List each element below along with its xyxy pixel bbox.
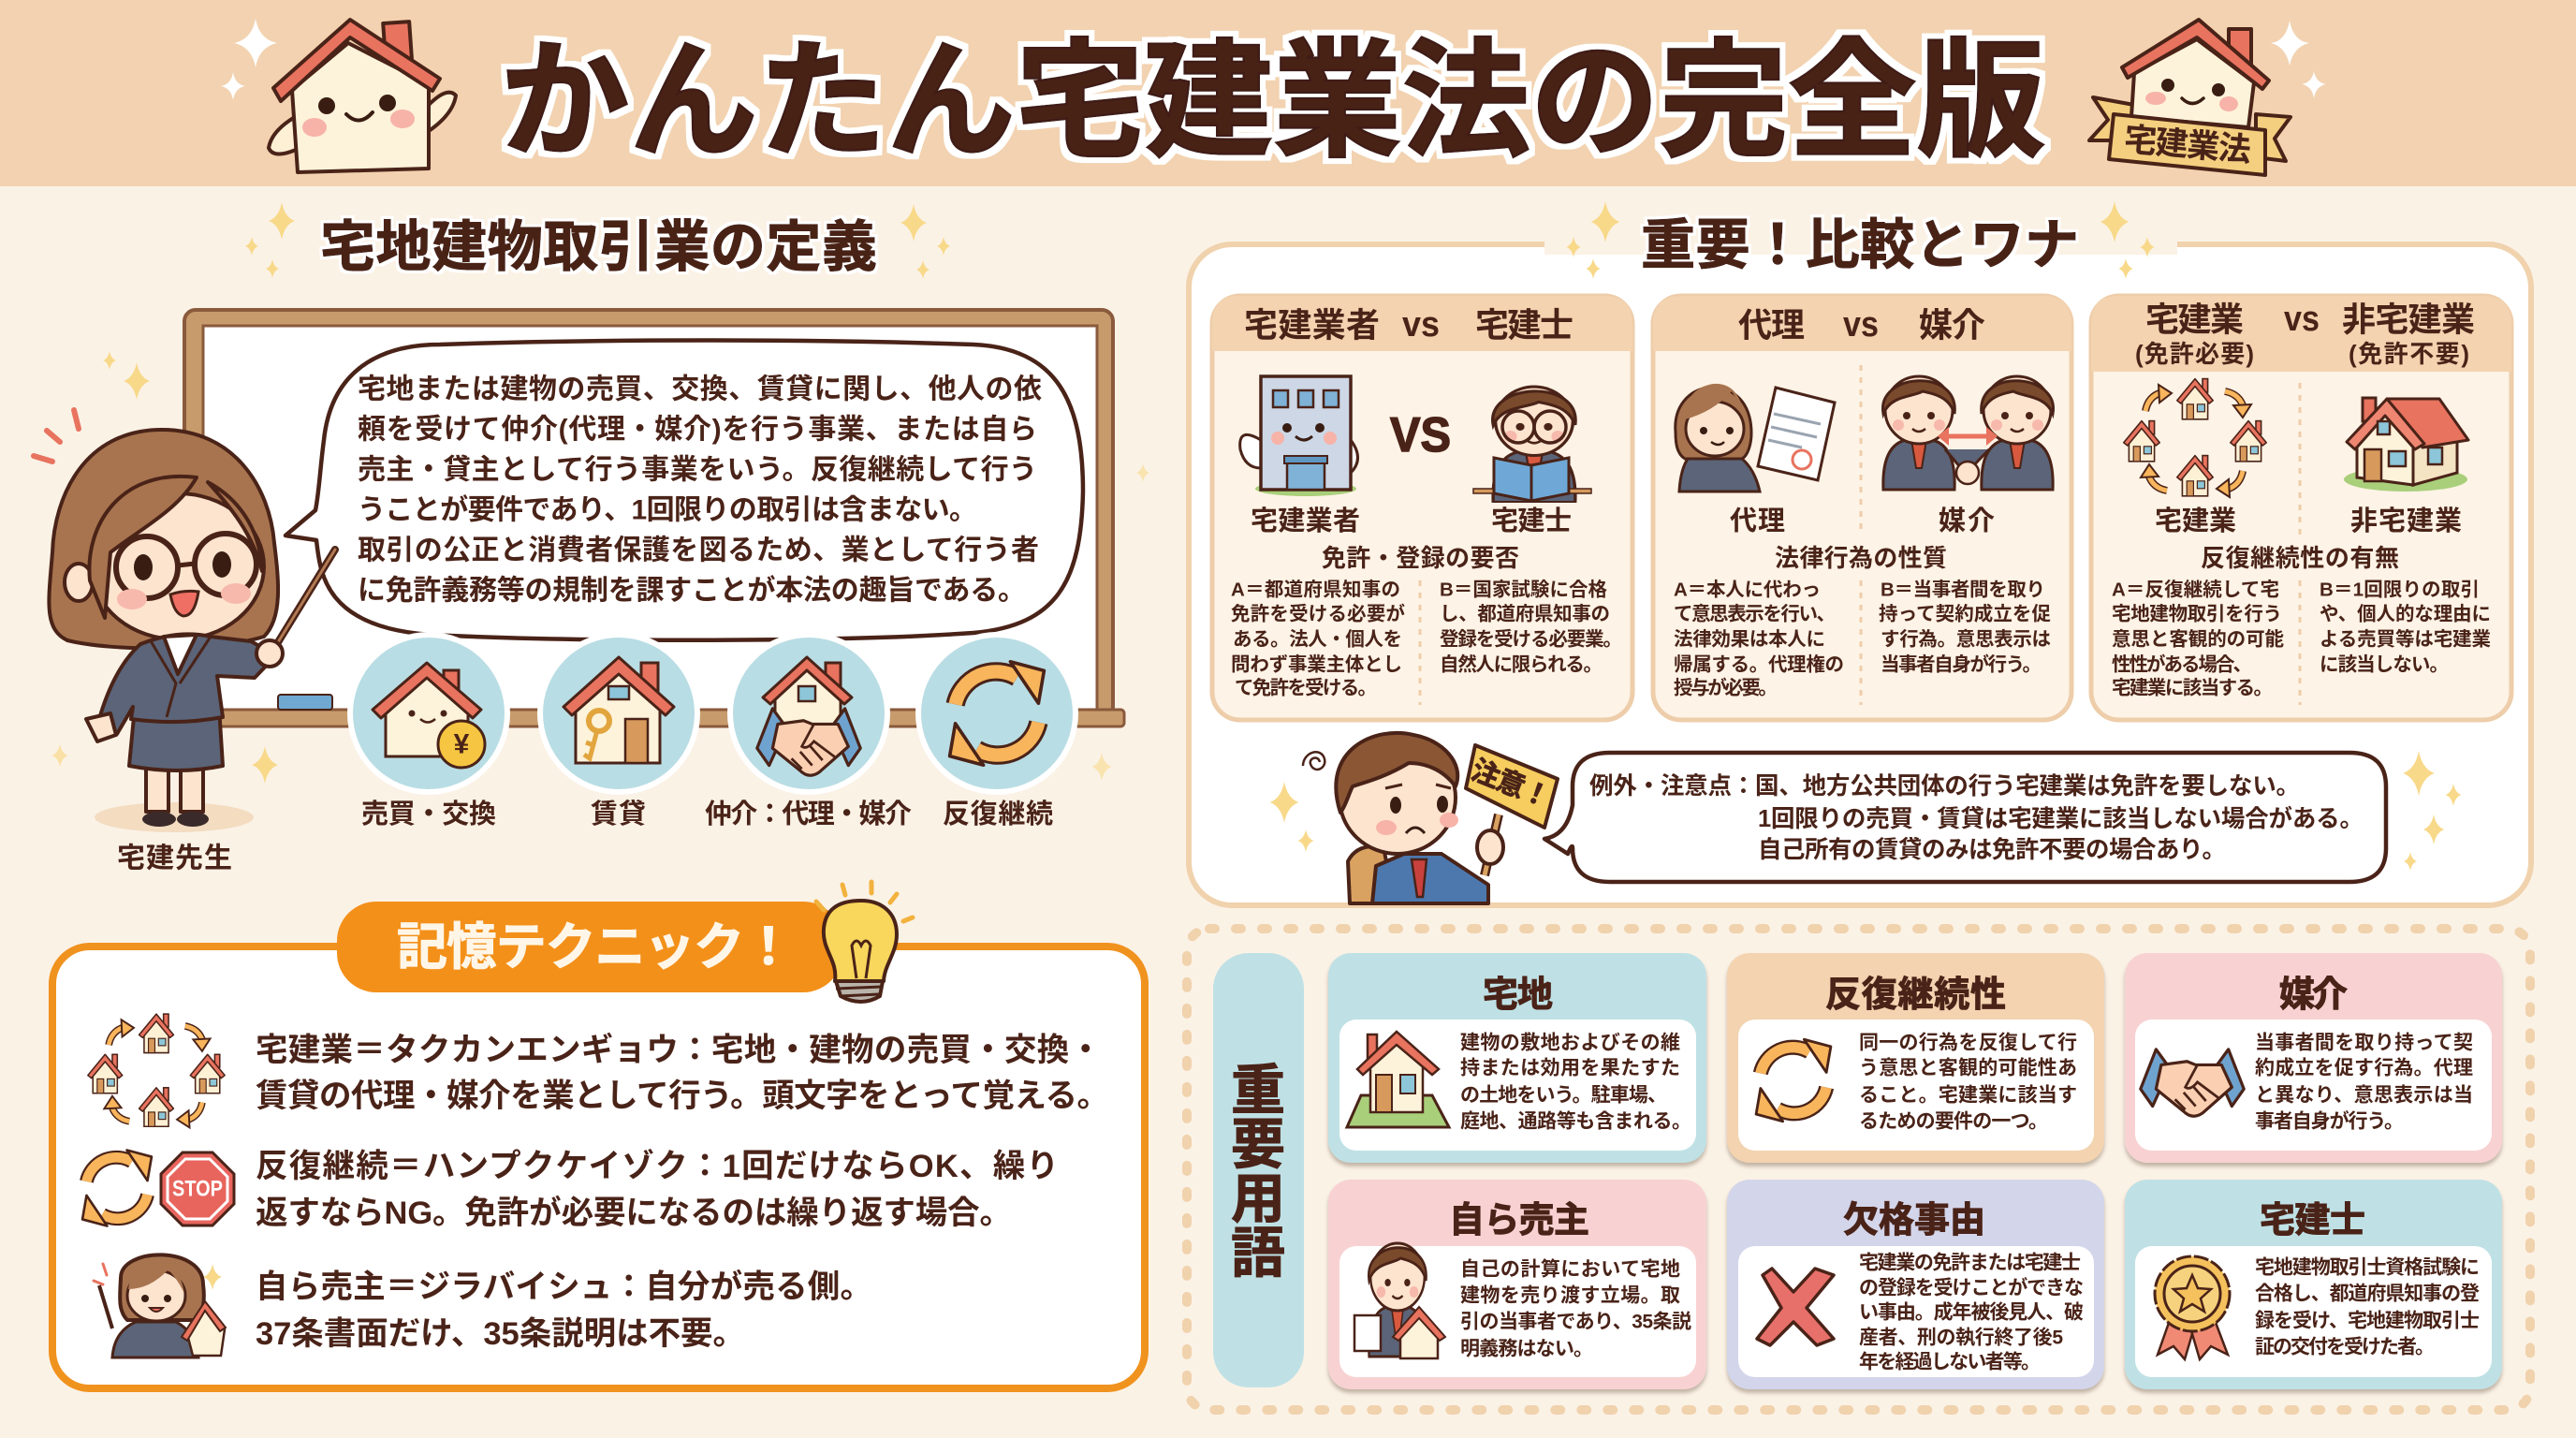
panel: memory techniques bbox=[52, 882, 1145, 1388]
term text: 年を経過しない者等。 bbox=[1859, 1352, 2041, 1372]
icon labels: 反復継続 bbox=[943, 799, 1053, 829]
memory tip 1 bbox=[256, 1033, 1109, 1114]
card header: 媒介 bbox=[1919, 305, 1985, 345]
sublabels: 宅建士 bbox=[1491, 506, 1572, 536]
term text: 庭地、通路等も含まれる。 bbox=[1460, 1110, 1691, 1133]
term text bbox=[1460, 1032, 1691, 1133]
jacket bbox=[97, 634, 276, 734]
icon: house on lot bbox=[1347, 1032, 1449, 1127]
term: residential land: 宅地 bbox=[1483, 976, 1553, 1015]
caution sign: 注意！ bbox=[1467, 755, 1555, 814]
column B text: 当事者自身が行う。 bbox=[1881, 653, 2042, 676]
icon: stop sign: STOP bbox=[172, 1176, 223, 1202]
definition text: に免許義務等の規制を課すことが本法の趣旨である。 bbox=[358, 575, 1026, 607]
card header: vs bbox=[2284, 300, 2320, 339]
term text: 宅建業の免許または宅建士 bbox=[1859, 1253, 2081, 1273]
column A text bbox=[1231, 579, 1406, 698]
term text: 同一の行為を反復して行 bbox=[1859, 1032, 2077, 1054]
title: かんたん宅建業法の完全版 bbox=[501, 30, 2045, 174]
panel: comparison and traps bbox=[1189, 201, 2531, 905]
memory tip 1: 宅建業＝タクカンエンギョウ：宅地・建物の売買・交換・ bbox=[256, 1033, 1102, 1068]
card header bbox=[2135, 300, 2475, 368]
term: residential land bbox=[1328, 953, 1706, 1163]
card header: 宅建業者 bbox=[1244, 305, 1380, 345]
sublabels: 代理 bbox=[1730, 506, 1785, 536]
sublabels: 法律行為の性質 bbox=[1775, 544, 1947, 572]
term text: う意思と客観的可能性あ bbox=[1859, 1058, 2077, 1078]
term text: 明義務はない。 bbox=[1460, 1339, 1593, 1359]
icon labels: 仲介：代理・媒介 bbox=[705, 799, 912, 829]
sublabels: 非宅建業 bbox=[2350, 506, 2462, 536]
column A text: て免許を受ける。 bbox=[1235, 678, 1377, 698]
term: self seller bbox=[1328, 1180, 1706, 1389]
column B text: 登録を受ける必要業。 bbox=[1440, 629, 1622, 650]
term: brokerage bbox=[2125, 953, 2502, 1163]
column A text: 意思と客観的の可能 bbox=[2112, 629, 2284, 650]
column A text: A＝都道府県知事の bbox=[1231, 579, 1400, 601]
term text: い事由。成年被後見人、破 bbox=[1859, 1301, 2084, 1324]
teacher character bbox=[34, 410, 335, 832]
card header: vs bbox=[1402, 305, 1440, 345]
column B text bbox=[1440, 579, 1622, 676]
term text: 合格し、都道府県知事の登 bbox=[2255, 1283, 2480, 1305]
memory tip 2: 反復継続＝ハンプクケイゾク：1回だけならOK、繰り bbox=[256, 1149, 1059, 1184]
icon: house with ribbon right: 宅建業法 bbox=[2123, 122, 2252, 169]
card: agency vs brokerage bbox=[1653, 296, 2071, 720]
term text: 持または効用を果たすた bbox=[1460, 1058, 1680, 1078]
callout text bbox=[1589, 773, 2364, 863]
sparkles: callout bbox=[1270, 751, 2461, 871]
card header: vs bbox=[1843, 305, 1879, 345]
sublabels bbox=[1730, 506, 1995, 572]
callout text: 1回限りの売買・賃貸は宅建業に該当しない場合がある。 bbox=[1758, 805, 2364, 832]
term: self seller: 自ら売主 bbox=[1449, 1201, 1589, 1240]
column B text bbox=[1879, 579, 2051, 676]
icon: medal bbox=[2155, 1256, 2230, 1359]
panel: key terms bbox=[1187, 929, 2530, 1410]
sparkles: definition heading bbox=[51, 202, 1149, 784]
term text bbox=[2255, 1256, 2480, 1357]
term text: と異なり、意思表示は当 bbox=[2255, 1084, 2473, 1107]
column A text: ある。法人・個人を bbox=[1233, 629, 1402, 650]
column A text: 宅建業に該当する。 bbox=[2112, 678, 2273, 698]
definition text: 取引の公正と消費者保護を図るため、業として行う者 bbox=[358, 536, 1039, 565]
column B text: 持って契約成立を促 bbox=[1879, 603, 2051, 625]
icon: light bulb bbox=[816, 882, 913, 1002]
sublabels bbox=[2155, 506, 2462, 572]
term text bbox=[1859, 1032, 2077, 1133]
icon: house with ribbon right bbox=[2089, 20, 2326, 175]
icon: red cross bbox=[1757, 1269, 1834, 1345]
header band bbox=[0, 0, 2576, 186]
term text: 録を受け、宅地建物取引士 bbox=[2255, 1311, 2480, 1331]
sublabels: 免許・登録の要否 bbox=[1322, 544, 1519, 572]
column B text bbox=[2320, 579, 2491, 676]
icon: agent woman with document bbox=[1676, 384, 1835, 492]
column B text: す行為。意思表示は bbox=[1881, 629, 2051, 650]
sidebar: key terms heading: 重 bbox=[1231, 1060, 1285, 1122]
column A text: 免許を受ける必要が bbox=[1231, 603, 1406, 625]
card: real estate business vs non-business bbox=[2091, 296, 2511, 720]
column B text: に該当しない。 bbox=[2320, 653, 2449, 676]
icon: brokerage bbox=[730, 635, 887, 792]
icon: house cycle bbox=[88, 1014, 225, 1127]
column B text: や、個人的な理由に bbox=[2320, 603, 2491, 625]
term text bbox=[2255, 1032, 2473, 1133]
column A text: 性性がある場合、 bbox=[2112, 653, 2252, 676]
icon: house cycle bbox=[2124, 379, 2266, 497]
definition text: 売主・貸主として行う事業をいう。反復継続して行う bbox=[358, 455, 1037, 485]
memory tip 3: 37条書面だけ、35条説明は不要。 bbox=[256, 1316, 745, 1352]
column A text: A＝本人に代わっ bbox=[1674, 579, 1821, 601]
term text bbox=[1460, 1258, 1691, 1359]
term text bbox=[1859, 1253, 2084, 1372]
caution sign bbox=[1466, 745, 1558, 828]
column B text: よる売買等は宅建業 bbox=[2320, 629, 2491, 650]
term text: の土地をいう。駐車場、 bbox=[1460, 1084, 1667, 1107]
definition text bbox=[358, 374, 1042, 607]
card header: 宅建業 bbox=[2145, 300, 2244, 339]
term text: 自己の計算において宅地 bbox=[1460, 1258, 1680, 1281]
icon: smiling house left bbox=[221, 19, 456, 172]
card header: 宅建士 bbox=[1475, 305, 1573, 345]
column A text: 宅地建物取引を行う bbox=[2112, 603, 2282, 625]
column A text: 帰属する。代理権の bbox=[1674, 653, 1844, 676]
term: repetition: 反復継続性 bbox=[1825, 976, 2006, 1015]
term text: 宅地建物取引士資格試験に bbox=[2255, 1256, 2480, 1279]
floor shadow bbox=[95, 802, 254, 832]
term text: 建物を売り渡す立場。取 bbox=[1460, 1284, 1680, 1307]
icon: buying and selling: ¥ bbox=[454, 728, 470, 760]
heading: definition: 宅地建物取引業の定義 bbox=[320, 216, 877, 278]
definition text: 宅地または建物の売買、交換、賃貸に関し、他人の依 bbox=[358, 374, 1042, 404]
term: licensed agent bbox=[2125, 1180, 2502, 1389]
icon: office building bbox=[1240, 376, 1357, 496]
pointer bbox=[278, 550, 335, 642]
sidebar: key terms heading: 用 bbox=[1231, 1168, 1285, 1230]
card header: (免許不要) bbox=[2349, 340, 2469, 368]
icon labels bbox=[361, 799, 1053, 829]
column A text: 法律効果は本人に bbox=[1674, 629, 1825, 650]
skirt and legs bbox=[146, 763, 168, 812]
card header bbox=[1738, 305, 1985, 345]
icon labels: 賃貸 bbox=[591, 799, 646, 829]
icon: repetition bbox=[918, 635, 1076, 792]
column A text: 授与が必要。 bbox=[1674, 676, 1778, 698]
definition text: 頼を受けて仲介(代理・媒介)を行う事業、または自ら bbox=[358, 414, 1037, 446]
label: teacher: 宅建先生 bbox=[117, 843, 232, 874]
term text: 証の交付を受けた者。 bbox=[2255, 1337, 2435, 1357]
whiteboard bbox=[184, 310, 1124, 726]
badge: heading bbox=[337, 902, 842, 992]
memory tip 3: 自ら売主＝ジラバイシュ：自分が売る側。 bbox=[256, 1269, 872, 1305]
term text: 約成立を促す行為。代理 bbox=[2255, 1056, 2473, 1078]
sidebar: key terms heading: 語 bbox=[1231, 1223, 1285, 1284]
definition text: うことが要件であり、1回限りの取引は含まない。 bbox=[358, 494, 977, 526]
column B text: B＝国家試験に合格 bbox=[1440, 579, 1608, 601]
term: disqualification bbox=[1727, 1180, 2104, 1389]
column B text: し、都道府県知事の bbox=[1440, 603, 1610, 625]
speech bubble: definition bbox=[285, 341, 1083, 640]
icon: licensed agent with book bbox=[1473, 387, 1591, 502]
icon: handshake bbox=[2141, 1049, 2244, 1116]
column A text bbox=[2112, 579, 2284, 698]
memory tip 1: 賃貸の代理・媒介を業として行う。頭文字をとって覚える。 bbox=[256, 1078, 1109, 1114]
column B text: 自然人に限られる。 bbox=[1440, 653, 1603, 676]
term text: ること。宅建業に該当す bbox=[1859, 1084, 2077, 1107]
column A text: て意思表示を行い、 bbox=[1674, 603, 1836, 625]
card header: (免許必要) bbox=[2135, 340, 2254, 368]
sublabels bbox=[1251, 503, 1577, 572]
memory tip 3 bbox=[256, 1269, 872, 1352]
term: disqualification: 欠格事由 bbox=[1843, 1201, 1985, 1240]
heading: comparison: 重要！比較とワナ bbox=[1641, 215, 2079, 275]
term: repetition bbox=[1727, 953, 2104, 1163]
VS mark: VS bbox=[1390, 408, 1451, 462]
card header: 非宅建業 bbox=[2342, 300, 2475, 339]
sublabels: 宅建業 bbox=[2155, 506, 2236, 536]
icon: rental bbox=[540, 635, 697, 792]
term text: 引の当事者であり、35条説 bbox=[1460, 1311, 1691, 1333]
sublabels: 媒介 bbox=[1939, 506, 1995, 536]
icon: stop sign bbox=[161, 1152, 234, 1225]
term: licensed agent: 宅建士 bbox=[2260, 1201, 2365, 1240]
sublabels: 宅建業者 bbox=[1251, 506, 1360, 536]
column A text: 問わず事業主体とし bbox=[1231, 653, 1402, 676]
sidebar: key terms heading bbox=[1213, 953, 1304, 1387]
character: worried boy with sign bbox=[1303, 733, 1558, 903]
icon: buying and selling bbox=[350, 635, 507, 792]
icon: loop arrows bbox=[1756, 1039, 1831, 1122]
sublabels: 反復継続性の有無 bbox=[2201, 544, 2399, 572]
term text: の登録を受けことができな bbox=[1859, 1277, 2084, 1299]
term: brokerage: 媒介 bbox=[2279, 976, 2348, 1015]
callout: exceptions bbox=[1544, 753, 2386, 882]
card header bbox=[1244, 305, 1573, 345]
icon: mini teacher bbox=[94, 1255, 226, 1357]
callout text: 自己所有の賃貸のみは免許不要の場合あり。 bbox=[1758, 837, 2226, 863]
term text: 産者、刑の執行終了後5 bbox=[1859, 1328, 2063, 1348]
eraser bbox=[278, 695, 332, 710]
badge: heading: 記憶テクニック！ bbox=[397, 919, 794, 976]
memory tip 2 bbox=[256, 1149, 1059, 1231]
column B text: B＝1回限りの取引 bbox=[2320, 579, 2480, 601]
memory tip 2: 返すならNG。免許が必要になるのは繰り返す場合。 bbox=[256, 1195, 1012, 1231]
term text: 当事者間を取り持って契 bbox=[2255, 1032, 2473, 1054]
icon labels: 売買・交換 bbox=[361, 799, 496, 829]
term text: るための要件の一つ。 bbox=[1859, 1110, 2048, 1133]
sparkles: comparison heading bbox=[1566, 201, 2155, 279]
icon: seller with house bbox=[1354, 1243, 1445, 1358]
card: broker vs licensed agent bbox=[1212, 296, 1632, 720]
sidebar: key terms heading: 要 bbox=[1231, 1114, 1285, 1176]
icon: two men shaking hands bbox=[1882, 376, 2054, 490]
term text: 建物の敷地およびその維 bbox=[1460, 1032, 1680, 1054]
icon: loop arrows bbox=[82, 1151, 152, 1225]
icon: single house bbox=[2344, 398, 2468, 492]
column A text bbox=[1674, 579, 1844, 698]
column B text: B＝当事者間を取り bbox=[1881, 579, 2045, 601]
card header: 代理 bbox=[1738, 305, 1805, 345]
column A text: A＝反復継続して宅 bbox=[2112, 579, 2279, 601]
term text: 事者自身が行う。 bbox=[2255, 1110, 2404, 1133]
callout text: 例外・注意点：国、地方公共団体の行う宅建業は免許を要しない。 bbox=[1589, 773, 2300, 800]
